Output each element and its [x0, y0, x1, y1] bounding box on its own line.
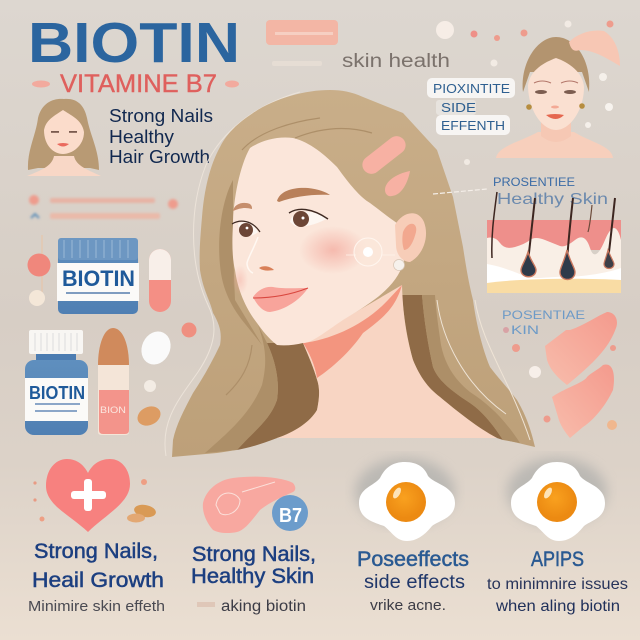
caption: strong nails, healthy skin: Healthy Skin: [191, 565, 314, 588]
icon: fried egg 1: [355, 458, 455, 541]
caption: tips: [487, 548, 628, 615]
benefits text block: Strong Nails: [109, 106, 213, 126]
vial with almond cap: [98, 328, 129, 435]
left eye: [238, 222, 258, 236]
icon: fried egg 2: [507, 458, 607, 541]
face: [232, 137, 404, 345]
caption: strong nails, healthy skin: [191, 543, 316, 615]
jar of biotin: BIOTIN: [62, 266, 135, 291]
pill: [136, 327, 176, 369]
ear: [395, 213, 426, 262]
benefits text block: [109, 106, 213, 167]
callout: side effects labels: [427, 78, 515, 135]
caption: tips: to minimnire issues: [487, 576, 628, 593]
right eye: [290, 212, 328, 227]
almond: [134, 403, 164, 429]
decorative flower (pink): [144, 322, 196, 392]
hair clips: [359, 133, 410, 196]
title: Biotin: BIOTIN: [28, 11, 240, 75]
caption: strong nails, hair growth: Minimire skin effeth: [28, 598, 165, 615]
skin diagram heading: [493, 177, 608, 208]
skin diagram heading: PROSENTIEE: [493, 177, 575, 189]
main illustration: woman profile: [165, 90, 535, 457]
capsule: [149, 249, 171, 312]
earring: [394, 260, 404, 270]
hair shadow (right): [402, 295, 503, 440]
caption: strong nails, hair growth: Strong Nails,: [34, 540, 158, 563]
chest and neck: [277, 285, 497, 438]
skin spot callout: [346, 238, 395, 266]
lips: [253, 287, 308, 312]
decorative flower and dots (top): [436, 20, 614, 66]
icon: heart with plus: [33, 459, 147, 532]
header pink bar: [266, 20, 338, 45]
caption: strong nails, hair growth: Heail Growth: [32, 569, 164, 592]
hair silhouette: [172, 90, 535, 457]
skin diagram heading: Healthy Skin: [497, 191, 608, 208]
subtitle: Vitamine B7: VITAMINE B7: [60, 70, 217, 98]
icon: woman touching hair: [464, 30, 620, 165]
benefits text block: Hair Growth: [109, 147, 210, 167]
caption: side effects: Poseeffects: [357, 548, 469, 571]
caption: side effects: [357, 548, 469, 614]
icon: liver with B7 badge: B7: [279, 505, 302, 527]
caption: tips: when aling biotin: [495, 598, 620, 615]
icon: small woman portrait: [27, 99, 101, 176]
potential skin label: [502, 310, 585, 337]
cheek blush: [299, 226, 367, 274]
caption: strong nails, healthy skin: Strong Nails,: [192, 543, 316, 566]
note: skin health: skin health: [342, 51, 450, 72]
eyebrows: [277, 188, 330, 202]
bottle of biotin: [25, 330, 88, 435]
bottle of biotin: BIOTIN: [29, 383, 85, 403]
neck shadow: [303, 285, 402, 378]
hair mid tone (right): [422, 295, 520, 443]
jar of biotin: [57, 238, 139, 314]
hair strands: [226, 118, 372, 395]
potential skin label: POSENTIAE: [502, 310, 585, 322]
potential skin label: KIN: [511, 325, 539, 337]
decorative note rows (left): [29, 195, 178, 219]
hair mid tone near face: [219, 180, 262, 345]
benefits text block: Healthy: [109, 127, 174, 147]
arrow: to skin diagram: [433, 189, 487, 194]
callout: side effects labels: PIOXINTITE: [433, 82, 510, 96]
callout: side effects labels: SIDE: [441, 101, 476, 115]
vial with almond cap: BION: [100, 405, 126, 415]
caption: side effects: vrike acne.: [370, 597, 446, 614]
icon: almonds: [127, 503, 157, 522]
caption: strong nails, hair growth: [28, 540, 165, 615]
hair shadow (left): [237, 343, 319, 450]
outer hair line: [165, 92, 300, 456]
flower marker: [28, 235, 50, 306]
caption: strong nails, healthy skin: aking biotin: [221, 598, 306, 615]
callout: side effects labels: EFFENTH: [441, 119, 505, 133]
caption: tips: APIPS: [531, 548, 584, 571]
nose: [247, 237, 274, 273]
skin cross-section diagram: [487, 192, 621, 293]
note: skin health: [272, 51, 450, 72]
icon: pink skin patches: [512, 312, 617, 438]
caption: side effects: side effects: [364, 572, 465, 593]
hair mid tone (left): [205, 325, 278, 453]
icon: liver with B7 badge: [203, 477, 308, 533]
